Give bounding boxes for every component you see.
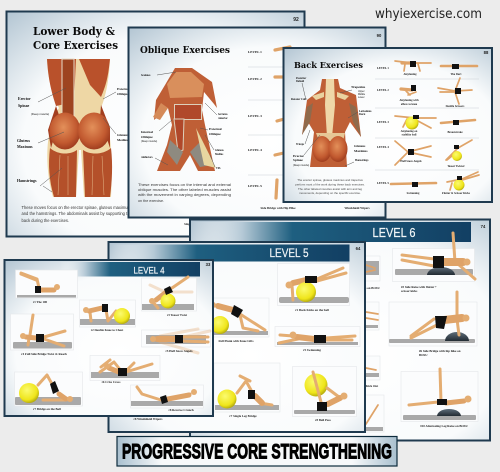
panel: page 74 level 6: [190, 220, 490, 440]
exercise: bridge on the ball: r7 Bridge on the Ball: [33, 407, 61, 411]
exercise: alternating leg raise on BOSU: #10 Alternating Leg Raise on BOSU: [420, 424, 469, 428]
exercise: back kicks on the ball: r2 Back Kicks on the ball: [295, 308, 329, 312]
muscle labels: oblique: Serratus: [218, 113, 228, 116]
muscle labels: lower body: External: [117, 87, 130, 91]
muscle labels: back: Trapezius: [351, 85, 366, 89]
panel: page 64 level 5: [108, 242, 365, 432]
exercise row 2: Airplaning with: [399, 99, 419, 102]
exercise row 2: [399, 78, 472, 108]
muscle labels: back: Posterior: [296, 77, 307, 80]
exercise: side bridge with hip hike on BOSU: #6 Side Bridge with hip hike on: [419, 349, 461, 353]
exercise: alternating leg raise on BOSU: [401, 369, 478, 428]
panel: page 33 level 4: [4, 260, 213, 416]
exercise: full side bridge twist and reach: [10, 314, 74, 356]
muscle labels: lower body: Oblique: [117, 92, 129, 96]
muscle labels: lower body: Gluteus: [17, 139, 30, 143]
level rows: back exercises: LEVEL 1: [377, 66, 389, 70]
exercise: swimming: r5 Swimming: [303, 348, 321, 352]
muscle labels: lower body: Maximus: [17, 145, 33, 149]
heading: core exercises: Core Exercises: [33, 39, 118, 52]
figure: lower body muscles: [47, 59, 112, 197]
body text: oblique: These exercises focus on the internal and external: [138, 183, 231, 187]
exercise: side raise on BOSU: #3 Side Raise with flutter +: [401, 285, 437, 289]
exercise: ball pass: r8 Ball Pass: [315, 418, 332, 422]
exercise row 4: Half Snow Angels: [400, 160, 422, 163]
muscle labels: lower body: [17, 87, 130, 192]
figure: back muscles: [302, 79, 361, 167]
muscle labels: lower body: Medius: [117, 138, 128, 142]
header band level 4: [60, 262, 200, 276]
muscle labels: oblique: Scalenes: [141, 74, 150, 77]
page number 90: 90: [377, 33, 382, 38]
header band level 6: [192, 222, 471, 242]
body text: lower body: [22, 205, 133, 223]
heading level 5: LEVEL 5: [270, 246, 309, 260]
muscle labels: lower body: Hamstrings: [17, 179, 37, 183]
level rows: back exercises: LEVEL 2: [377, 88, 389, 92]
exercise row 3: stability ball: [402, 134, 417, 136]
heading: lower body: Lower Body &: [33, 25, 115, 38]
muscle labels: back: Hamstrings: [355, 159, 368, 162]
exercise: criss cross: r6 Criss Cross: [102, 380, 121, 384]
exercise row 5: [391, 172, 479, 195]
body text: back: movements, depending on the specific exercise.: [299, 191, 361, 195]
page number 74: 74: [481, 224, 486, 229]
body text: oblique: on the exercise.: [138, 199, 164, 203]
body text: back: perform most of the work during these back exercises.: [295, 182, 365, 186]
level list: oblique: LEVEL 4: [248, 148, 262, 152]
muscle labels: back: Spinae: [293, 158, 303, 162]
body text: back: The erector spinae, gluteus maximus and trapezius: [297, 178, 363, 182]
exercise: full plank with knee lifts: Full Plank with Knee Lifts: [218, 339, 254, 343]
body text: lower body: These moves focus on the erector spinae, gluteus maximus: [22, 205, 130, 210]
muscle labels: oblique: Oblique: [141, 135, 153, 139]
muscle labels: back: Dorsi: [359, 113, 366, 116]
exercise: side bridge with hip hike on BOSU: [389, 292, 477, 357]
exercise row 5: Flutter & Scissor Kicks: [442, 192, 471, 195]
muscle labels: back: (Deep muscle): [293, 164, 309, 167]
page number 64: 64: [356, 246, 361, 251]
exercise: the 100: r1 The 100: [33, 300, 48, 304]
muscle labels: lower body: Erector: [18, 97, 31, 101]
heading: oblique exercises: Oblique Exercises: [140, 45, 230, 56]
exercise: side bridge with hip hike on BOSU: BOSU: [419, 353, 428, 357]
heading: back exercises: Back Exercises: [294, 61, 363, 71]
body text: oblique: [138, 183, 231, 203]
muscle labels: oblique: Internal: [141, 130, 153, 134]
heading level 4: LEVEL 4: [134, 266, 164, 276]
muscle labels: lower body: Spinae: [18, 104, 30, 108]
exercise: side raise on BOSU: [392, 233, 475, 293]
exercise row 1: [395, 61, 477, 76]
exercise row 2: Double Scissors: [446, 105, 465, 108]
exercise: single leg bridge: [214, 363, 280, 418]
muscle labels: back: Lower: [358, 96, 365, 99]
body text: oblique: with the movement in varying degrees, depending: [138, 193, 231, 197]
exercise row 4: [395, 140, 472, 168]
exercise: double knee to chest: r2 Double Knee to Chest: [91, 328, 124, 332]
exercise: swimming: [275, 326, 360, 352]
muscle labels: lower body: Gluteus: [117, 133, 129, 137]
hidden exercise cards: Kick Out: [366, 384, 379, 388]
muscle labels: oblique: TFL: [216, 167, 221, 170]
body text: lower body: and the hamstrings. The abdominals assist by supporting the: [22, 211, 133, 216]
level rows: back exercises: LEVEL 3: [377, 120, 389, 124]
banner title: [117, 436, 397, 466]
exercise: criss cross: [90, 356, 160, 384]
muscle labels: back: Deltoid: [296, 80, 305, 83]
exercise: teaser twist: [142, 277, 196, 317]
heading level 6: LEVEL 6: [372, 225, 416, 240]
exercise: full side bridge twist and reach: r4 Full Side Bridge Twist & Reach: [21, 352, 67, 356]
exercise row 3: [395, 115, 475, 136]
muscle labels: back: [291, 77, 371, 167]
exercise: ball pass: [292, 366, 356, 422]
site name: whyiexercise.com: [375, 7, 482, 22]
exercise: half snow angels: [142, 329, 210, 353]
level rows: back exercises: [375, 66, 479, 185]
hidden exercise cards: ts on BOSU: [364, 286, 380, 290]
caption: windshield wipers: r8 Windshield Wipers: [134, 417, 163, 421]
level list: oblique: Side Bridge with Hip Hike: [261, 206, 296, 210]
page number 33: 33: [206, 262, 211, 267]
exercise row 3: Airplaning on: [401, 130, 418, 133]
muscle labels: oblique: Adductors: [141, 156, 153, 159]
exercise: full plank with knee lifts: [210, 298, 269, 343]
page number 92: 92: [293, 17, 299, 23]
exercise row 1: The Dart: [451, 73, 462, 76]
body text: oblique: oblique muscles. The other labeled muscles assist: [138, 188, 231, 192]
exercise row 4: Teaser Twister: [447, 165, 465, 168]
page number 88: 88: [484, 50, 489, 55]
muscle labels: back: Rotator Cuff: [291, 98, 306, 101]
muscle labels: back: Maximus: [354, 149, 368, 153]
exercise: single leg bridge: r7 Single Leg Bridge: [229, 414, 257, 418]
muscle labels: oblique: Anterior: [218, 117, 228, 120]
level list: oblique: LEVEL 3: [248, 114, 262, 118]
body text: back: The other labeled muscles assist with arm and leg: [298, 187, 362, 191]
body text: lower body: back during the exercises.: [22, 218, 69, 223]
level list: oblique: Windshield Wipers: [344, 206, 370, 210]
level rows: back exercises: LEVEL 5: [377, 181, 389, 185]
exercise: back kicks on the ball: [278, 264, 350, 312]
body text: back: [295, 178, 365, 195]
exercise row 5: Swimming: [407, 192, 420, 195]
exercise: double knee to chest: [80, 300, 136, 332]
muscle labels: back: Upper: [358, 90, 365, 93]
exercise: the 100: [16, 270, 78, 304]
muscle labels: oblique: Oblique: [209, 132, 221, 136]
muscle labels: oblique: [141, 72, 228, 170]
muscle labels: back: Middle: [358, 93, 366, 96]
muscle labels: back: Latissimus: [359, 110, 371, 113]
level list: oblique: LEVEL 5: [248, 184, 262, 188]
exercise row 3: Breaststroke: [447, 131, 463, 134]
header band level 5: [111, 244, 350, 262]
muscle labels: back: Triceps: [296, 143, 304, 146]
level list: oblique: [248, 47, 384, 210]
panel: page 88 back exercises: [284, 48, 492, 202]
exercise: reverse crunch: [130, 385, 204, 412]
caption behind page 90: Sing: [184, 222, 190, 226]
muscle labels: back: Gluteus: [354, 144, 366, 148]
exercise: side raise on BOSU: scissor kicks: [401, 289, 418, 293]
muscle labels: back: Erector: [293, 154, 305, 158]
exercise: reverse crunch: r8 Reverse Crunch: [168, 408, 194, 412]
level list: oblique: LEVEL 1: [248, 50, 262, 54]
muscle labels: oblique: (Deep muscle): [141, 140, 157, 143]
muscle labels: oblique: External: [209, 127, 222, 131]
exercise row 1: Airplaning: [403, 73, 417, 76]
level list: oblique: LEVEL 2: [248, 77, 262, 81]
muscle labels: oblique: Medius: [215, 153, 223, 156]
level rows: back exercises: LEVEL 4: [377, 145, 389, 149]
muscle labels: lower body: (Deep muscle): [31, 112, 49, 116]
exercise row 2: elbow to knee: [401, 103, 418, 106]
figure: oblique muscles: [153, 68, 217, 171]
exercise: teaser twist: r3 Teaser Twist: [167, 313, 188, 317]
exercise: half snow angels: r5 Half Snow Angels: [165, 349, 193, 353]
panel: page 92 lower body and core exercises: [6, 12, 304, 236]
exercise: bridge on the ball: [14, 372, 82, 411]
panel: page 90 oblique exercises: [128, 28, 386, 218]
hidden exercise cards: [360, 256, 384, 432]
muscle labels: oblique: Gluteus: [215, 149, 224, 152]
